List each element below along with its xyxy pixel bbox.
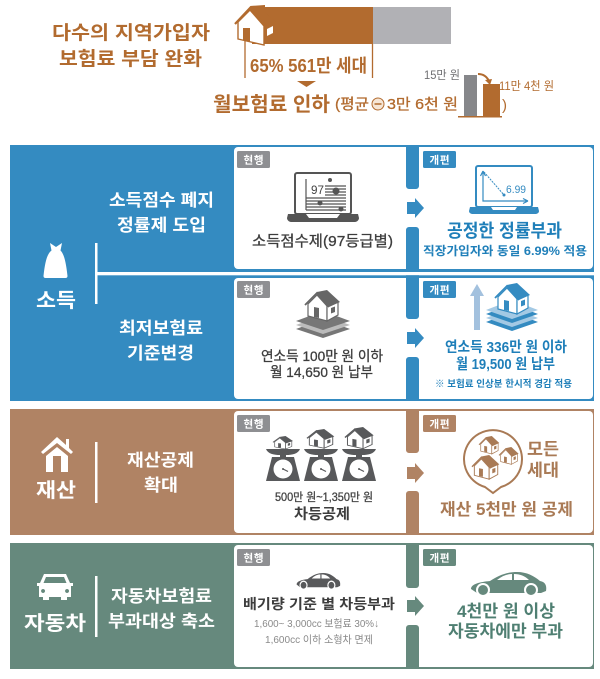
text: current property deduction: 500만 원~1,350만 원 [275, 490, 373, 504]
badge: reform [423, 415, 456, 432]
text: reformed car rule: 자동차에만 부과 [448, 622, 563, 641]
heading: deduction expansion: 재산공제 [127, 451, 194, 470]
icon: laptop with rate chart [469, 166, 539, 214]
card: property current and reform [234, 409, 593, 535]
badge: reform: 개편 [430, 284, 450, 296]
text: income point system: 소득점수제(97등급별) [252, 233, 393, 250]
text: fair flat rate: 직장가입자와 동일 6.99% 적용 [423, 243, 587, 258]
text: current minimum premium: 연소득 100만 원 이하 [261, 348, 383, 364]
badge: reform [423, 281, 456, 298]
text: fair flat rate: 공정한 정률부과 [447, 221, 562, 241]
mini bar chart: 11만 4천 원 [499, 78, 554, 93]
badge: reform: 개편 [430, 418, 450, 430]
badge: current: 현행 [244, 552, 264, 564]
text: reformed car rule: 4천만 원 이상 [457, 602, 555, 621]
icon: large car [471, 572, 546, 597]
heading: car premium scope: 부과대상 축소 [108, 612, 215, 631]
text: reformed minimum premium: 연소득 336만 원 이하 [445, 339, 568, 356]
text: current property deduction [275, 490, 373, 523]
monthly premium reduction: 월보험료 인하 [213, 93, 330, 116]
icon: house [235, 5, 278, 45]
down arrow [297, 81, 316, 87]
heading: minimum premium: 최저보험료 [119, 319, 203, 338]
text: current car rule [243, 596, 395, 646]
badge: reform: 개편 [430, 154, 450, 166]
heading: flat rate [109, 191, 214, 235]
property label: 재산 [36, 479, 76, 502]
text: reformed minimum premium: ※ 보험료 인상분 한시적 경감 적용 [435, 378, 572, 390]
text: all households: 모든 [527, 440, 559, 459]
heading: car premium scope: 자동차보험료 [111, 587, 212, 606]
panel: car [10, 543, 594, 669]
income label: 소득 [36, 290, 76, 312]
card: income points current and reform [234, 145, 593, 272]
card: minimum premium current and reform [234, 275, 593, 401]
title: 보험료 부담 완화 [59, 48, 202, 70]
icon: money bag [44, 243, 68, 278]
monthly premium reduction [213, 93, 507, 116]
text: all households: 세대 [527, 461, 559, 480]
car label: 자동차 [24, 612, 86, 635]
badge: reform [423, 151, 456, 168]
icon: small car [297, 573, 340, 590]
text: fair flat rate [423, 221, 587, 258]
icon: three scales with houses [266, 427, 376, 481]
monthly premium reduction: (평균 [335, 96, 369, 113]
heading: deduction expansion [127, 451, 194, 495]
text: current minimum premium [261, 348, 383, 380]
card: car current and reform [234, 543, 593, 669]
icon: laptop with grade chart: 97 [311, 185, 324, 197]
icon: house on thin layers [296, 290, 350, 338]
text: current car rule: 배기량 기준 별 차등부과 [243, 596, 395, 612]
badge: current [237, 549, 270, 566]
text: reformed car rule [448, 602, 563, 641]
arrow [407, 328, 424, 348]
icon: laptop with grade chart [287, 173, 359, 222]
badge: current [237, 415, 270, 432]
icon: house on thick layers [486, 283, 538, 331]
icon: car front [37, 574, 73, 600]
divider: income branch [96, 272, 594, 275]
monthly premium reduction: ) [502, 97, 507, 114]
heading: flat rate: 정률제 도입 [117, 216, 206, 235]
arrow [407, 596, 424, 616]
proportion bar: 65% of households [235, 5, 451, 78]
badge: reform [423, 549, 456, 566]
heading: minimum premium [119, 319, 203, 363]
title [52, 22, 211, 70]
badge: current [237, 151, 270, 168]
monthly premium reduction: 3만 6천 원 [387, 96, 458, 113]
mini bar chart [424, 68, 554, 118]
mini bar chart: 15만 원 [424, 68, 460, 82]
badge: current: 현행 [244, 418, 264, 430]
icon: laptop with rate chart: 6.99 [506, 184, 526, 196]
text: current car rule: 1,600cc 이하 소형차 면제 [265, 633, 373, 646]
text: reformed minimum premium [435, 339, 572, 390]
panel: income [10, 145, 594, 401]
icon: up arrow [470, 284, 484, 330]
arrow [407, 198, 424, 218]
text: all households [527, 440, 559, 480]
badge: current [237, 281, 270, 298]
text: reformed minimum premium: 월 19,500 원 납부 [456, 356, 555, 373]
badge: current: 현행 [244, 154, 264, 166]
household count label: 65% 561만 세대 [250, 56, 367, 76]
heading: deduction expansion: 확대 [144, 476, 178, 495]
heading: car premium scope [108, 587, 215, 631]
text: current car rule: 1,600~ 3,000cc 보험료 30%↓ [254, 618, 379, 630]
text: current property deduction: 차등공제 [294, 506, 350, 523]
text: current minimum premium: 월 14,650 원 납부 [270, 364, 373, 380]
text: 50 million deduction: 재산 5천만 원 공제 [440, 500, 573, 519]
heading: minimum premium: 기준변경 [127, 344, 194, 363]
title: 다수의 지역가입자 [52, 22, 211, 44]
icon: house [41, 437, 73, 472]
heading: flat rate: 소득점수 폐지 [109, 191, 214, 210]
panel: property [10, 409, 594, 535]
badge: reform: 개편 [430, 552, 450, 564]
icon: pin with three houses [464, 430, 522, 493]
arrow [407, 463, 424, 483]
badge: current: 현행 [244, 284, 264, 296]
